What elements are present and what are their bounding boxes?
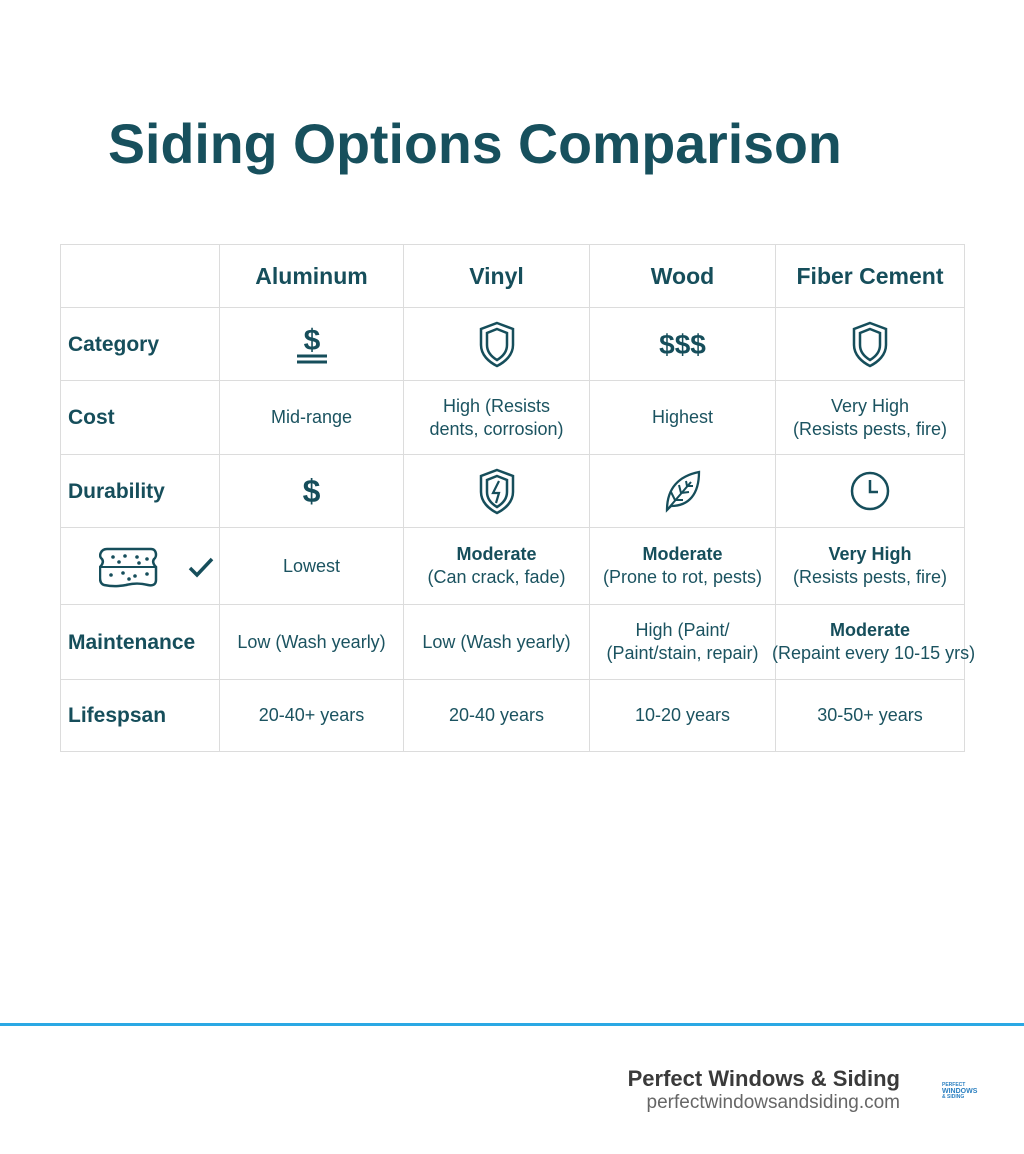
comparison table: Cost xyxy=(68,406,115,429)
comparison table: Low (Wash yearly) xyxy=(422,632,571,652)
comparison table: Aluminum xyxy=(255,262,368,288)
comparison table xyxy=(60,244,975,752)
comparison table: (Repaint every 10-15 yrs) xyxy=(772,643,975,663)
comparison table: Very High xyxy=(831,396,909,416)
comparison table: Vinyl xyxy=(469,262,524,288)
comparison table: dents, corrosion) xyxy=(429,418,564,438)
comparison table: (Prone to rot, pests) xyxy=(603,567,762,587)
footer divider xyxy=(0,1023,1024,1026)
comparison table: Wood xyxy=(651,262,714,288)
comparison table: Lowest xyxy=(283,556,340,576)
comparison table: (Resists pests, fire) xyxy=(793,418,947,438)
icon: logo: PERFECT xyxy=(942,1082,965,1088)
comparison table: High (Paint/ xyxy=(635,620,730,640)
comparison table: $$$ xyxy=(659,328,706,360)
icon: logo: WINDOWS xyxy=(942,1088,977,1095)
comparison table: Moderate xyxy=(830,620,910,640)
comparison table: Highest xyxy=(652,407,713,427)
icon: logo: & SIDING xyxy=(942,1094,964,1100)
comparison table: $ xyxy=(303,472,320,508)
comparison table: Maintenance xyxy=(68,630,195,654)
comparison table: (Paint/stain, repair) xyxy=(606,643,759,663)
comparison table: (Can crack, fade) xyxy=(427,567,566,587)
comparison table: $ xyxy=(303,324,320,357)
comparison table: Fiber Cement xyxy=(796,262,943,288)
comparison table: Low (Wash yearly) xyxy=(237,632,386,652)
footer brand text xyxy=(628,1066,900,1113)
comparison table: Durability xyxy=(68,480,165,502)
comparison table: Mid-range xyxy=(271,407,352,427)
comparison table: 20-40+ years xyxy=(259,705,364,725)
comparison table: 10-20 years xyxy=(635,705,730,725)
comparison table: 30-50+ years xyxy=(817,705,923,725)
title: Siding Options Comparison xyxy=(108,113,842,175)
comparison table: Lifespsan xyxy=(68,704,166,727)
comparison table: (Resists pests, fire) xyxy=(793,567,947,587)
comparison table: High (Resists xyxy=(443,396,550,416)
footer brand text: Perfect Windows & Siding xyxy=(628,1066,900,1091)
comparison table: 20-40 years xyxy=(449,705,544,725)
footer brand text: perfectwindowsandsiding.com xyxy=(647,1092,900,1113)
comparison table: Category xyxy=(68,332,159,356)
comparison table: Very High xyxy=(828,544,912,564)
icon: logo xyxy=(942,1082,978,1100)
comparison table: Moderate xyxy=(456,544,536,564)
comparison table: Moderate xyxy=(642,544,722,564)
